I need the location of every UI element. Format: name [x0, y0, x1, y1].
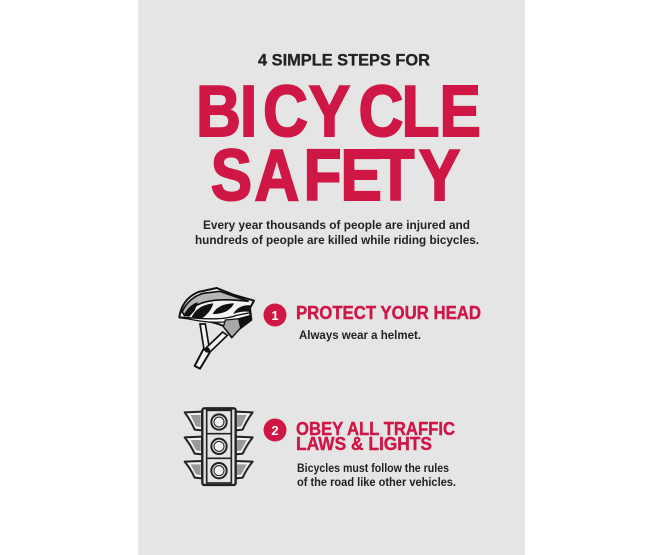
step 1 text: Always wear a helmet.: [299, 330, 421, 342]
title: SAFETY: [211, 135, 460, 216]
step 2 text: Bicycles must follow the rules: [297, 463, 449, 475]
wings: [185, 412, 253, 478]
intro text: hundreds of people are killed while riding bicycles.: [195, 235, 479, 247]
title: [196, 71, 481, 216]
step 1 heading: PROTECT YOUR HEAD: [296, 303, 481, 323]
step 1 badge: [264, 304, 286, 326]
intro text: [195, 220, 479, 247]
step 1 badge: 1: [271, 308, 279, 323]
step 2 text: [297, 463, 456, 489]
title: BICYCLE: [196, 71, 481, 152]
subtitle: 4 SIMPLE STEPS FOR: [258, 52, 430, 70]
icon: traffic light: [185, 408, 253, 485]
step 2 heading: OBEY ALL TRAFFIC: [296, 419, 455, 439]
icon: helmet: [179, 288, 254, 369]
step 2 badge: 2: [271, 423, 279, 438]
wing hatching: [191, 415, 247, 475]
step 2 heading: [296, 419, 455, 454]
step 2 badge: [264, 418, 286, 442]
poster panel: [138, 0, 525, 555]
intro text: Every year thousands of people are injured and: [203, 220, 470, 232]
step 2 heading: LAWS & LIGHTS: [296, 434, 432, 454]
step 2 text: of the road like other vehicles.: [297, 477, 456, 489]
